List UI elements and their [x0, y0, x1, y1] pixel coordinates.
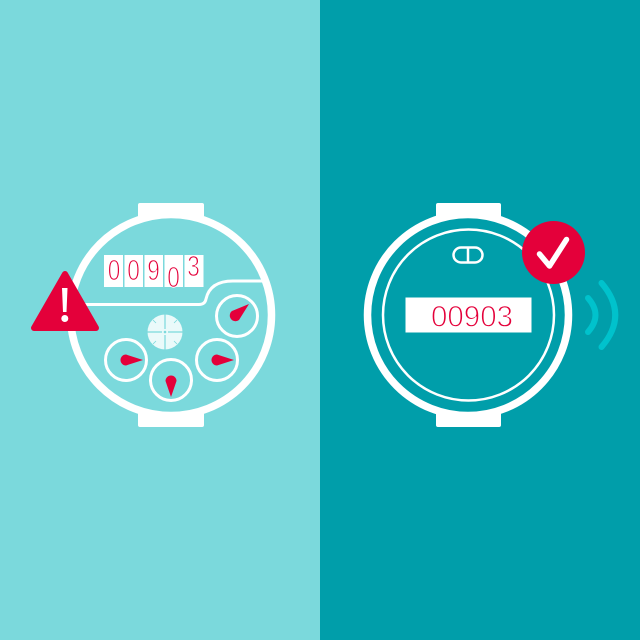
meter inner ring [383, 230, 554, 400]
icon: warning triangle [34, 274, 96, 328]
dial: upper right [216, 296, 258, 336]
inner divider line [80, 281, 263, 304]
smart water meter [368, 203, 568, 427]
dial: lower left [106, 340, 146, 380]
exclamation mark [62, 288, 68, 312]
meter bottom tab [138, 405, 204, 427]
digit counter: 0 [108, 253, 120, 287]
analog water meter [70, 203, 272, 427]
digit counter: 0 [167, 260, 180, 294]
icon: wireless signal waves [588, 283, 615, 347]
digit counter: 3 [187, 249, 200, 283]
icon: check badge [522, 221, 585, 284]
center star wheel [148, 314, 182, 350]
meter top tab [436, 203, 501, 225]
panel: left background [0, 0, 320, 640]
exclamation dot [61, 315, 68, 322]
digit counter: 0 [127, 253, 140, 287]
digit counter: 9 [147, 253, 160, 287]
meter outer ring [368, 214, 568, 416]
meter body ring [70, 214, 272, 416]
digital display: 00903 [431, 300, 513, 334]
digital display [406, 298, 532, 334]
dial: lower right [196, 340, 238, 380]
dial: bottom [150, 360, 192, 400]
capsule icon [454, 248, 482, 262]
digit counter [104, 249, 204, 294]
panel: right background [320, 0, 640, 640]
meter top tab [138, 203, 204, 225]
meter bottom tab [436, 405, 501, 427]
